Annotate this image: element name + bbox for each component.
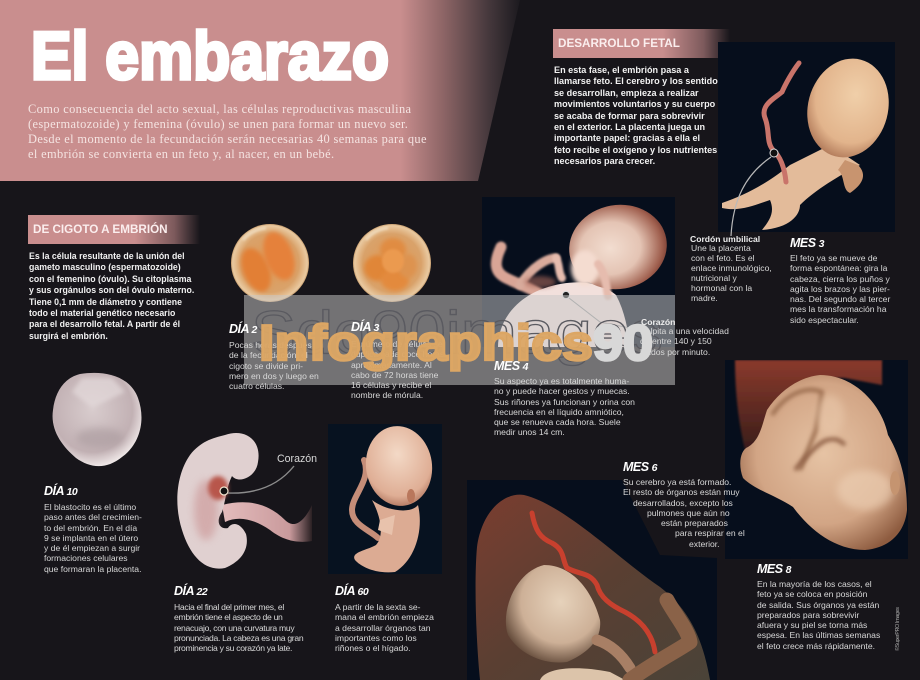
description: A partir de la sexta se- (335, 602, 421, 612)
description: cuatro células. (229, 381, 284, 391)
description: para respirar en el (675, 528, 745, 538)
watermark main text: Infographics (259, 315, 593, 371)
mes 4 (494, 359, 644, 439)
description (494, 376, 635, 438)
head (361, 422, 437, 510)
legs and body (722, 145, 860, 230)
description: Su aspecto ya es totalmente huma- (494, 376, 629, 386)
leg (496, 247, 548, 298)
description: espesa. En las últimas semanas (757, 630, 880, 640)
section intro: feto: necesarios para crecer. (554, 156, 655, 166)
section intro: cigoto: todo el material genético necesario (29, 308, 175, 318)
description: medir unos 14 cm. (494, 427, 565, 437)
head (506, 565, 600, 663)
hands (556, 258, 608, 296)
section intro: cigoto: surgirá el embrión. (29, 331, 108, 341)
description (351, 339, 444, 400)
raised arm (630, 600, 690, 680)
image: mes 6 fetus (467, 480, 717, 680)
image credit: ©SuperPRO Images (894, 607, 901, 651)
description (757, 579, 880, 651)
description: de la fecundación, el (229, 350, 308, 360)
description: que se renueva cada hora. Suele (494, 417, 621, 427)
description (229, 340, 319, 391)
description: nas. Del segundo al tercer (790, 294, 890, 304)
description: mero en dos y luego en (229, 371, 319, 381)
description: forma espontánea: gira la (790, 263, 887, 273)
head (562, 197, 674, 297)
description: latidos por minuto. (640, 347, 710, 357)
description (790, 253, 890, 325)
description: nombre de mórula. (351, 390, 423, 400)
description: de entre 140 y 150 (640, 336, 712, 346)
watermark panel (244, 295, 675, 385)
placenta (735, 360, 882, 450)
description: cabo de 72 horas tiene (351, 370, 438, 380)
section intro: feto: importante papel: gracias a ella el (554, 133, 700, 143)
section intro: feto: se desarrollan, empieza a realizar (554, 88, 699, 98)
cord (352, 460, 378, 538)
heart marker (220, 487, 228, 495)
intro text: el embrión se convierta en un feto y, al nacer, en un bebé. (28, 147, 334, 161)
ear (622, 274, 642, 288)
watermark outline text: Sdo90images (251, 299, 663, 366)
image: día 10 blastocyst (52, 372, 142, 466)
description: enlace inmunológico, (691, 263, 772, 273)
intro text: (espermatozoide) y femenina (óvulo) se unen para formar un nuevo ser. (28, 117, 408, 131)
section intro: feto: se acaba de formar para sobrevivir (554, 111, 705, 121)
body (177, 433, 259, 569)
section intro: feto: llamarse feto. El cerebro y los sentidos (554, 76, 723, 86)
description: a desarrollar órganos tan (335, 623, 431, 633)
watermark lettering (244, 295, 675, 385)
description (44, 502, 142, 574)
description: prominencia y su corazón ya late. (174, 643, 292, 653)
description: que formaran la placenta. (44, 564, 141, 574)
umbilical cord (532, 513, 655, 652)
description: están preparados (661, 518, 728, 528)
heading: DÍA 2 (229, 322, 257, 336)
description: madre. (691, 293, 718, 303)
section intro: feto: movimientos voluntarios y su cuerpo (554, 99, 715, 109)
description: 9 se implanta en el útero (44, 533, 138, 543)
description: mana el embrión empieza (335, 612, 434, 622)
description: pulmones que aún no (647, 508, 730, 518)
description: importantes como los (335, 633, 417, 643)
cord marker (770, 149, 778, 157)
section intro: cigoto: Tiene 0,1 mm de diámetro y contiene (29, 297, 182, 307)
heading: MES 6 (623, 460, 657, 474)
image: día 3 morula (353, 224, 431, 302)
description: El feto ya se mueve de (790, 253, 877, 263)
description: cabeza, cierra los puños y (790, 274, 890, 284)
intro text: Como consecuencia del acto sexual, las células reproductivas masculina (28, 102, 411, 116)
description: feto ya se coloca en posición (757, 589, 867, 599)
callout: cordón umbilical (690, 234, 772, 303)
image: día 2 zygote (231, 224, 309, 302)
callout line (228, 466, 294, 493)
intro text: Desde el momento de la fecundación serán necesarias 40 semanas para que (28, 132, 427, 146)
section intro: feto: En esta fase, el embrión pasa a (554, 65, 689, 75)
section intro: cigoto: Es la célula resultante de la unión del (29, 251, 185, 261)
description: hormonal con la (691, 283, 752, 293)
heading: DÍA 10 (44, 484, 77, 498)
head (796, 49, 900, 167)
description (335, 602, 434, 653)
heading: MES 4 (494, 359, 528, 373)
description: to del embrión. En el día (44, 523, 137, 533)
image: día 60 fetus (328, 424, 442, 574)
description: En la mayoría de los casos, el (757, 579, 872, 589)
description: paso antes del crecimien- (44, 512, 142, 522)
section intro: feto: feto recibe el oxígeno y los nutrientes (554, 145, 717, 155)
description: y de él empiezan a surgir (44, 543, 140, 553)
description: Sus riñones ya funcionan y orina con (494, 397, 635, 407)
description: de salida. Sus órganos ya están (757, 600, 879, 610)
mes 3 (790, 236, 890, 325)
description: aproximadamente. Al (351, 360, 432, 370)
heading: MES 3 (790, 236, 824, 250)
body (740, 375, 907, 550)
watermark number: 90 (593, 315, 653, 371)
section tag: desarrollo fetal (553, 29, 730, 58)
callout line (731, 157, 771, 236)
description: sido espectacular. (790, 315, 859, 325)
image: mes 3 fetus (718, 42, 895, 236)
description: no y puede hacer gestos y muecas. (494, 386, 630, 396)
description: el feto crece más rápidamente. (757, 641, 875, 651)
description: renacuajo, con una curvatura muy (174, 623, 294, 633)
description: Pocas horas después (229, 340, 312, 350)
callout: corazón: Corazón (277, 453, 317, 465)
section tag: de cigoto a embrión: DE CIGOTO A EMBRIÓN (33, 223, 168, 236)
label: Corazón (641, 317, 675, 327)
description: Une la placenta (691, 243, 751, 253)
description: desarrollados, excepto los (633, 498, 733, 508)
description (174, 602, 304, 653)
description: con el feto. Es el (691, 253, 755, 263)
image: mes 8 fetus (725, 360, 908, 559)
description: 16 células y recibe el (351, 380, 431, 390)
folded limbs shading (772, 390, 822, 470)
label: Cordón umbilical (690, 234, 760, 244)
umbilical cord (764, 63, 799, 182)
description: Palpita a una velocidad (640, 326, 729, 336)
description: nutricional y (691, 273, 737, 283)
description (640, 326, 729, 357)
description: embrión tiene el aspecto de un (174, 612, 283, 622)
image: mes 4 fetus (482, 197, 675, 347)
día 2 (229, 322, 319, 391)
heading: DÍA 3 (351, 320, 379, 334)
section intro: cigoto: gameto masculino (espermatozoide) (29, 262, 181, 272)
description: duplica cada doce horas (351, 349, 444, 359)
description: preparados para sobrevivir (757, 610, 859, 620)
section intro: cigoto: para el desarrollo fetal. A partir de él (29, 319, 180, 329)
día 60 (335, 584, 434, 653)
día 22 (174, 584, 304, 653)
mes 8 (757, 562, 880, 651)
body (354, 500, 420, 572)
section intro: cigoto: y sus orgánulos son del óvulo materno. (29, 285, 194, 295)
amniotic sac (476, 495, 710, 680)
description: cigoto se divide pri- (229, 361, 303, 371)
description: agita los brazos y las pier- (790, 284, 890, 294)
description: El blastocito es el último (44, 502, 136, 512)
heading: DÍA 60 (335, 584, 368, 598)
día 10 (44, 484, 142, 574)
description: afuera y su piel se torna más (757, 620, 867, 630)
description: exterior. (689, 539, 720, 549)
mes 6 (623, 460, 745, 549)
heading: DÍA 22 (174, 584, 207, 598)
torso (498, 282, 630, 347)
heading: MES 8 (757, 562, 791, 576)
callout line (569, 298, 640, 330)
description: Hacia el final del primer mes, el (174, 602, 284, 612)
umbilical tail (222, 502, 312, 542)
section intro: cigoto (29, 251, 194, 341)
description: pronunciada. La cabeza es una gran (174, 633, 303, 643)
description: El resto de órganos están muy (623, 487, 740, 497)
description: Su cerebro ya está formado. (623, 477, 731, 487)
description: formaciones celulares (44, 553, 128, 563)
section tag: desarrollo fetal: DESARROLLO FETAL (558, 37, 680, 50)
heart marker (562, 291, 570, 299)
section intro: cigoto: con el femenino (óvulo). Su citoplasma (29, 274, 191, 284)
hand under chin (597, 640, 630, 668)
section intro: feto: en el exterior. La placenta juega un (554, 122, 705, 132)
body (540, 668, 625, 680)
description: frecuencia en el líquido amniótico, (494, 407, 624, 417)
intro text (28, 102, 427, 161)
description (623, 477, 745, 549)
description: riñones o el hígado. (335, 643, 410, 653)
section intro: feto (554, 65, 723, 166)
callout: corazón mes 4 (640, 317, 735, 357)
section tag: de cigoto a embrión (28, 215, 200, 244)
description: El número de células se (351, 339, 443, 349)
image: día 22 embryo (177, 433, 312, 569)
description: mes la transformación ha (790, 304, 886, 314)
header panel (0, 0, 518, 181)
description (691, 243, 772, 303)
día 3 (351, 320, 444, 400)
